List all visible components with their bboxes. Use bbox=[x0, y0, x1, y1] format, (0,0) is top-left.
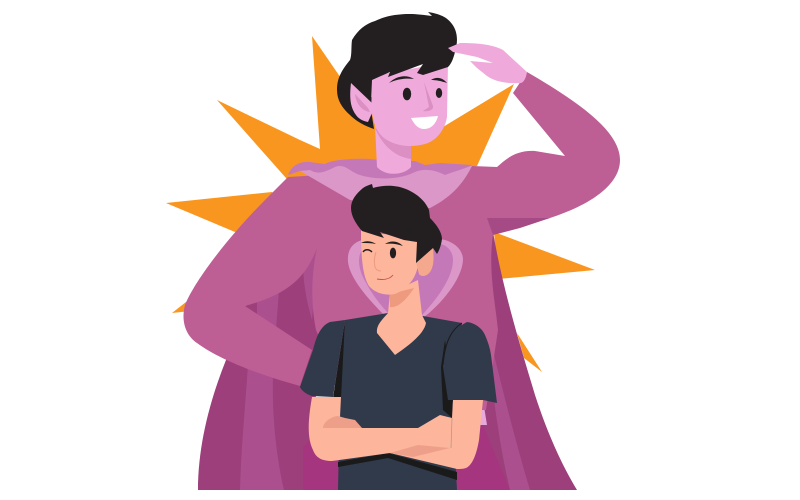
hand shadow bbox=[323, 416, 362, 428]
hero hair bbox=[337, 12, 457, 129]
cape right light stripe bbox=[486, 322, 530, 490]
arm line bbox=[451, 418, 452, 448]
boy open eye bbox=[390, 248, 396, 258]
boy shirt body bbox=[338, 313, 462, 490]
cape left dark bbox=[198, 260, 320, 490]
right sleeve bbox=[443, 322, 497, 403]
hero ear bbox=[350, 83, 372, 122]
boy smile bbox=[377, 275, 393, 280]
hero brows bbox=[389, 76, 447, 83]
cape collar bbox=[288, 159, 472, 208]
hero smile bbox=[411, 116, 438, 129]
boy neck shadow bbox=[390, 288, 414, 307]
cape inner light stripe bbox=[257, 290, 279, 330]
sweater body bbox=[184, 72, 620, 410]
hero eyes bbox=[403, 88, 442, 100]
hero hand bbox=[448, 43, 527, 83]
collar wavy band bbox=[288, 159, 472, 178]
ear inner bbox=[355, 94, 370, 112]
cape bbox=[198, 218, 577, 490]
emblem inner bbox=[359, 240, 453, 315]
heart chest emblem bbox=[348, 230, 463, 318]
left sleeve bbox=[300, 320, 345, 397]
crossed arms bbox=[309, 397, 483, 469]
lower arm shadow bbox=[390, 445, 450, 457]
cape right dark bbox=[440, 218, 577, 490]
sweater hem bbox=[460, 400, 487, 425]
cape inner stripe upper bbox=[303, 246, 318, 320]
neck shadow bbox=[375, 128, 411, 159]
boy nose bbox=[374, 252, 381, 271]
emblem outer bbox=[348, 230, 463, 318]
boy neck bbox=[377, 280, 426, 355]
hero face bbox=[372, 62, 448, 146]
boy wink eye bbox=[363, 250, 372, 252]
hero nose bbox=[423, 82, 433, 111]
hero neck bbox=[375, 125, 411, 174]
orange starburst bbox=[166, 36, 595, 372]
collar light bbox=[300, 164, 472, 208]
sleeve shadows bbox=[333, 320, 453, 418]
sleeve seam bbox=[443, 323, 462, 365]
cape left light stripe bbox=[240, 365, 284, 490]
boy brows bbox=[361, 241, 403, 246]
boy hair bbox=[351, 184, 442, 263]
boy face bbox=[361, 230, 418, 295]
hero head bbox=[337, 12, 527, 174]
cape inner magenta bbox=[303, 420, 510, 490]
arm shadow bbox=[487, 218, 550, 235]
arm underside shadow bbox=[338, 453, 457, 480]
boy bbox=[300, 184, 497, 490]
boy ear bbox=[416, 248, 434, 276]
